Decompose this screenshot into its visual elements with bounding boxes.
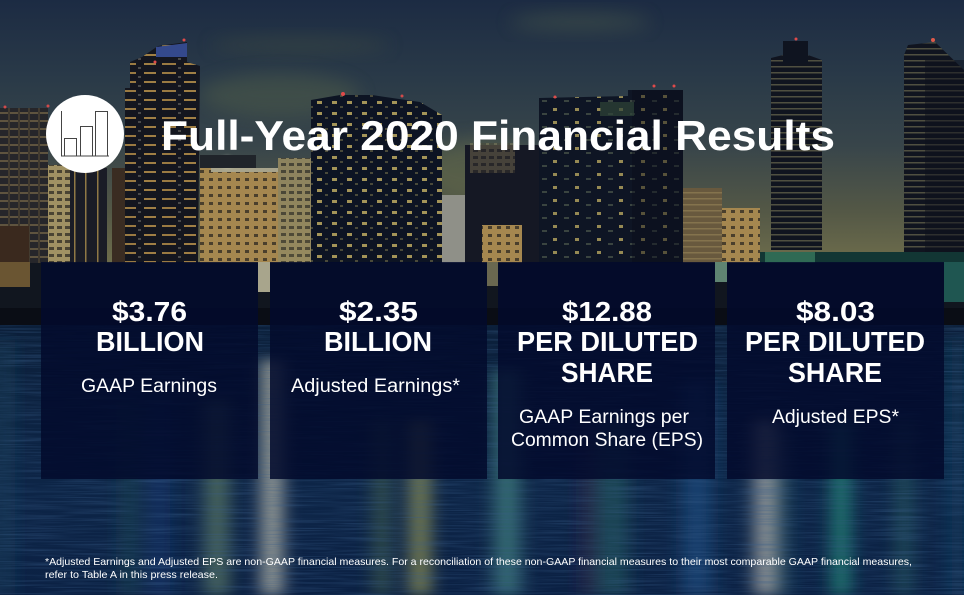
panel: GAAP earnings <box>41 262 258 479</box>
value: $2.35 billion <box>324 296 432 357</box>
panel: adjusted earnings <box>270 262 487 479</box>
value: $3.76 billion <box>96 296 204 357</box>
value: $3.76 billion: BILLION <box>96 326 204 357</box>
background: city skyline <box>0 38 964 263</box>
label: GAAP Earnings per Common Share: GAAP Earnings per <box>519 407 690 428</box>
value: $12.88 per diluted share: SHARE <box>561 357 653 388</box>
label: Adjusted Earnings: Adjusted Earnings* <box>291 376 461 397</box>
label: GAAP Earnings: GAAP Earnings <box>81 376 217 397</box>
value: $8.03 per diluted share: $8.03 <box>796 296 875 327</box>
value: $3.76 billion: $3.76 <box>112 296 187 327</box>
background: dark shoreline <box>0 262 964 325</box>
value: $8.03 per diluted share: PER DILUTED <box>745 326 925 357</box>
value: $2.35 billion: $2.35 <box>339 296 418 327</box>
value: $8.03 per diluted share: SHARE <box>788 357 882 388</box>
footnote: *Adjusted Earnings and Adjusted EPS are non-GAAP financial measures. For a reconciliation of these non-GAAP financial measures to their most comparable GAAP financial measures, <box>45 556 912 568</box>
background: night sky <box>0 0 964 265</box>
label: GAAP Earnings per Common Share: Common Share (EPS) <box>511 430 703 451</box>
label: Adjusted EPS: Adjusted EPS* <box>772 407 900 428</box>
value: $8.03 per diluted share <box>745 296 925 388</box>
panel: adjusted EPS <box>727 262 944 479</box>
panel: GAAP EPS <box>498 262 715 479</box>
title: Full-Year 2020 Financial Results <box>161 112 835 159</box>
value: $12.88 per diluted share: $12.88 <box>562 296 652 327</box>
icon: bar chart in white circle <box>46 95 124 173</box>
value: $12.88 per diluted share <box>517 296 698 388</box>
value: $2.35 billion: BILLION <box>324 326 432 357</box>
label: GAAP Earnings per Common Share <box>511 407 703 451</box>
footnote: refer to Table A in this press release. <box>45 569 218 581</box>
value: $12.88 per diluted share: PER DILUTED <box>517 326 698 357</box>
background: water with light reflections <box>0 325 964 595</box>
footnote <box>45 556 912 581</box>
